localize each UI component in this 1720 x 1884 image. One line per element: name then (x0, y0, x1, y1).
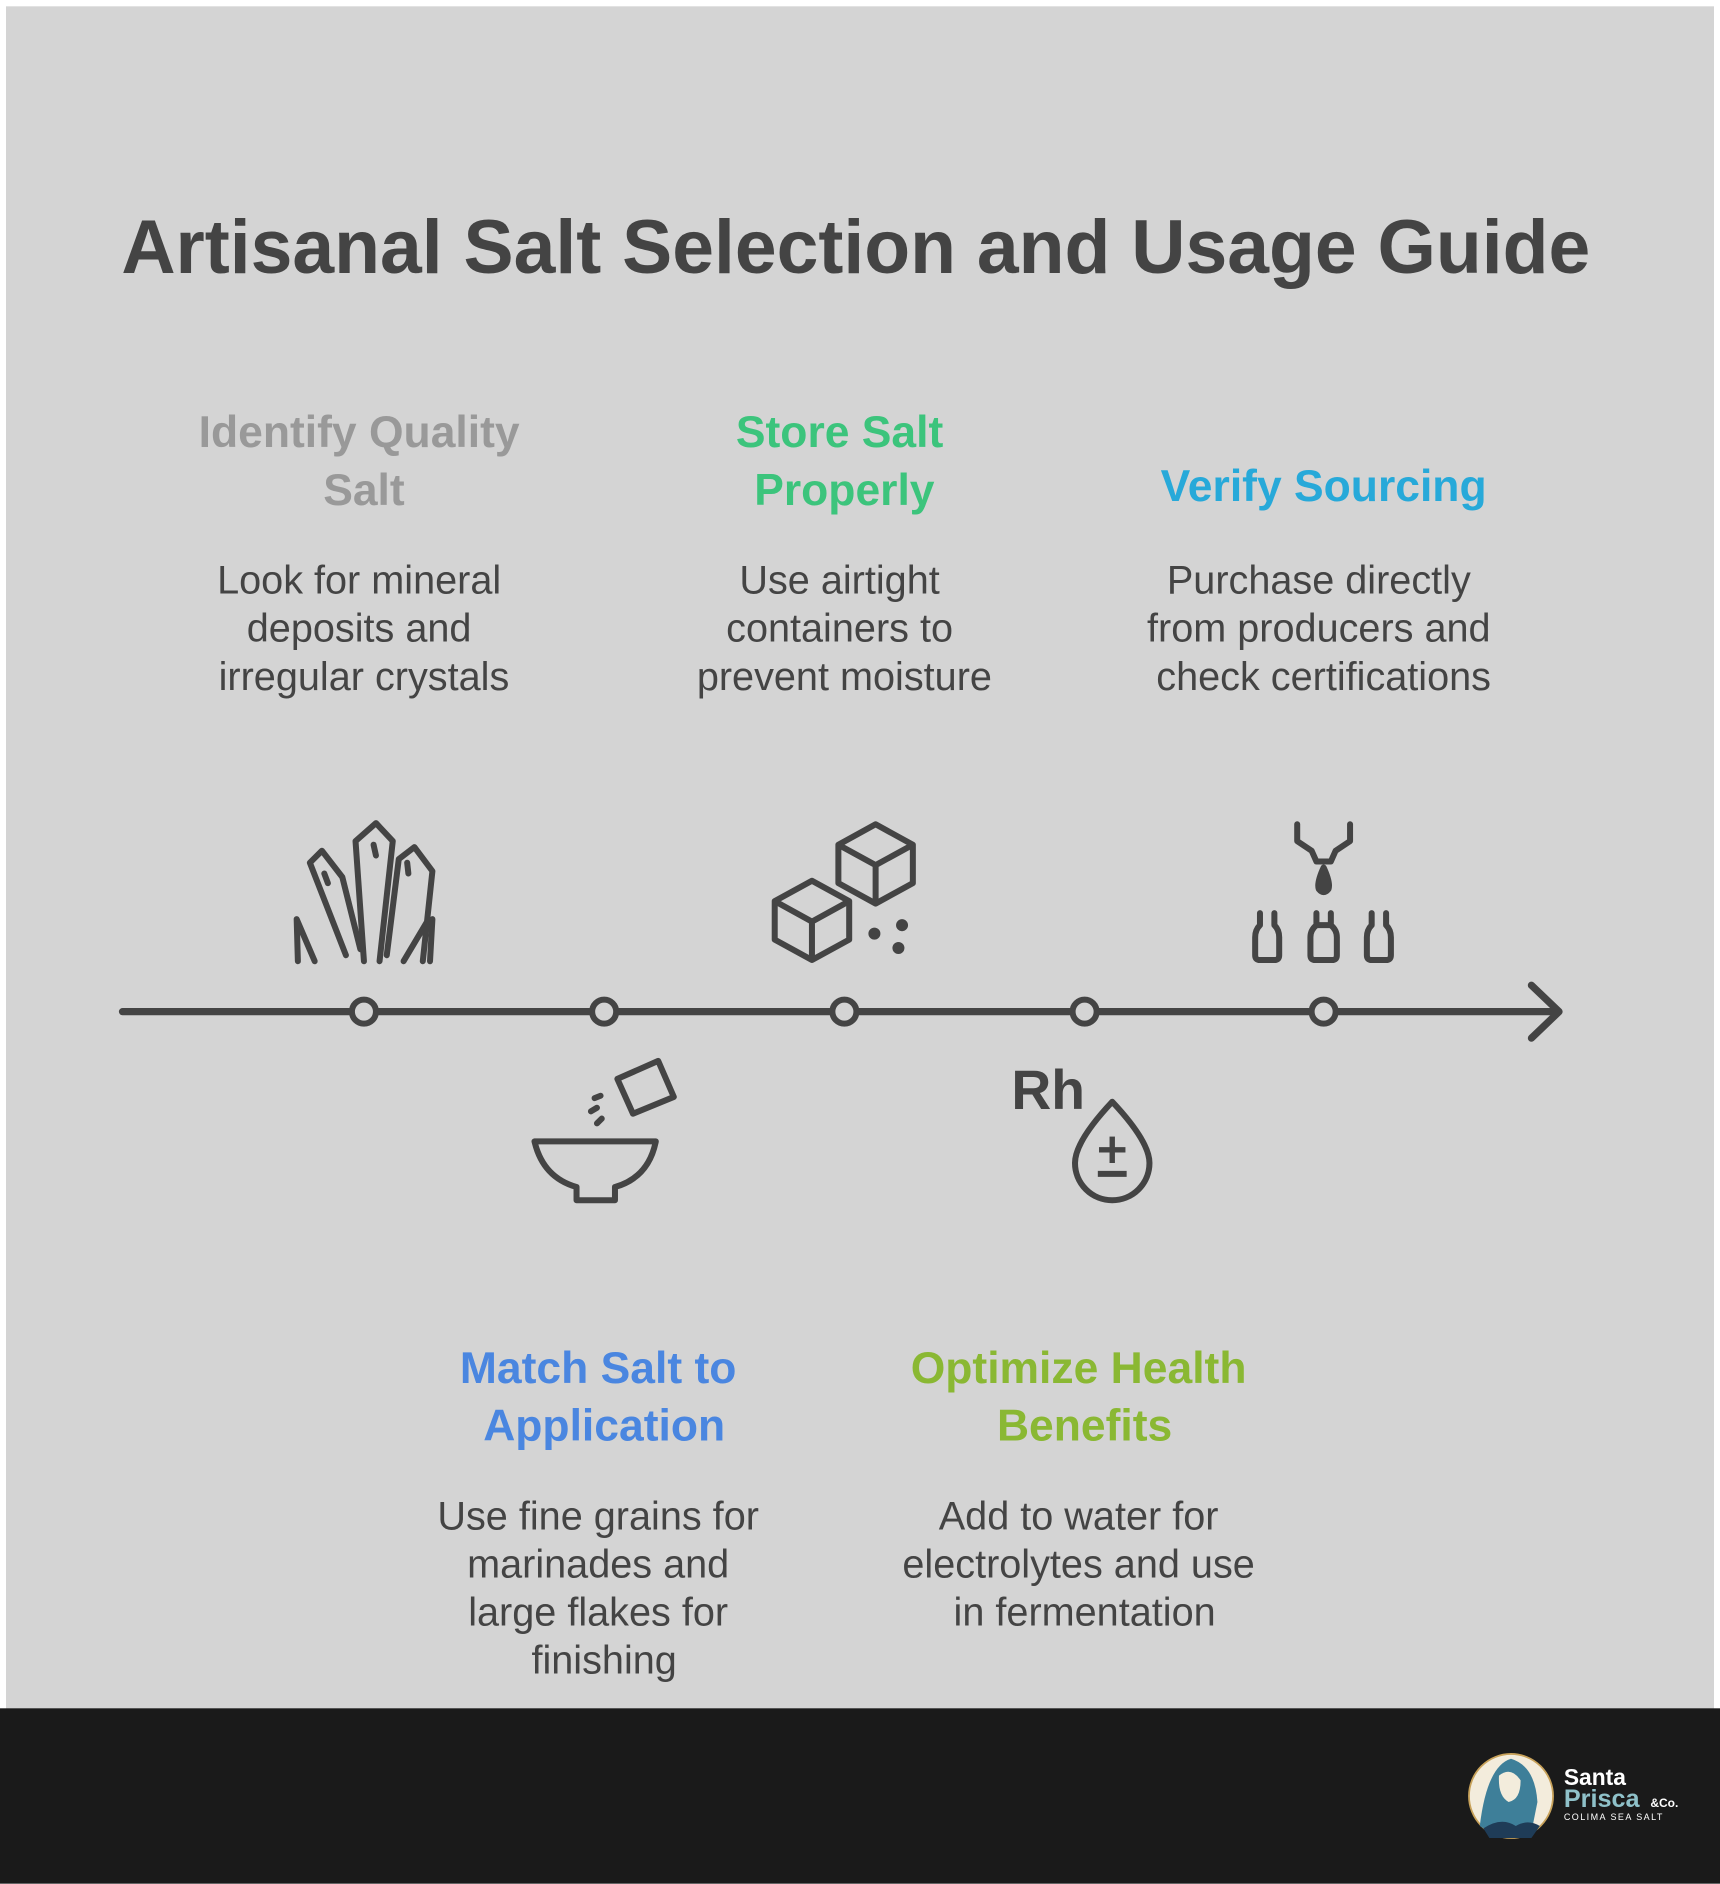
step 4 text: optimize health benefits: Add to water for (939, 1494, 1218, 1538)
icon: Rh water drop: Rh (1011, 1059, 1085, 1121)
timeline arrow (123, 985, 1559, 1038)
step 4 text: optimize health benefits: electrolytes and use (902, 1542, 1255, 1586)
logo: Santa Prisca (1469, 1754, 1678, 1838)
step 1 text: identify quality salt (199, 408, 520, 699)
step 3 text: store salt properly (697, 408, 992, 699)
step 2 text: match salt to application (437, 1344, 759, 1682)
icon: bowl with shaker (534, 1061, 674, 1200)
logo: Santa Prisca: COLIMA SEA SALT (1564, 1812, 1664, 1822)
footer bar (0, 1708, 1720, 1884)
step 3 text: store salt properly: containers to (726, 607, 953, 651)
step 4 text: optimize health benefits: Optimize Health (911, 1344, 1247, 1393)
step 2 text: match salt to application: Application (483, 1401, 725, 1450)
step 1 text: identify quality salt: Salt (323, 466, 405, 515)
icon: Rh water drop (1011, 1059, 1149, 1200)
step 3 text: store salt properly: Use airtight (739, 559, 940, 603)
icon: crystals (297, 823, 432, 961)
step 1 text: identify quality salt: deposits and (247, 607, 471, 651)
step 2 text: match salt to application: finishing (531, 1638, 677, 1682)
logo: Santa Prisca: &Co. (1650, 1796, 1678, 1810)
step 2 text: match salt to application: marinades and (467, 1542, 729, 1586)
logo: Santa Prisca: Prisca (1564, 1785, 1641, 1813)
step 4 text: optimize health benefits (902, 1344, 1255, 1634)
logo: Santa Prisca: Santa (1564, 1764, 1626, 1790)
step 3 text: store salt properly: Properly (754, 466, 935, 515)
step 5 text: verify sourcing: from producers and (1147, 607, 1491, 651)
step 2 text: match salt to application: Match Salt to (460, 1344, 736, 1393)
step 2 text: match salt to application: Use fine grains for (437, 1494, 759, 1538)
step 5 text: verify sourcing: Verify Sourcing (1161, 462, 1487, 511)
step 4 text: optimize health benefits: Benefits (997, 1401, 1172, 1450)
step 3 text: store salt properly: prevent moisture (697, 655, 992, 699)
step 1 text: identify quality salt: Look for mineral (217, 559, 501, 603)
step 1 text: identify quality salt: Identify Quality (199, 408, 520, 457)
step 2 text: match salt to application: large flakes for (468, 1590, 728, 1634)
title: Artisanal Salt Selection and Usage Guide (121, 205, 1590, 290)
step 4 text: optimize health benefits: in fermentation (954, 1590, 1216, 1634)
icon: salt cubes (775, 824, 913, 960)
step 5 text: verify sourcing: Purchase directly (1167, 559, 1471, 603)
icon: sourcing bottles (1255, 824, 1391, 960)
step 1 text: identify quality salt: irregular crystals (219, 655, 509, 699)
step 5 text: verify sourcing (1147, 462, 1491, 699)
step 3 text: store salt properly: Store Salt (736, 408, 943, 457)
step 5 text: verify sourcing: check certifications (1156, 655, 1491, 699)
